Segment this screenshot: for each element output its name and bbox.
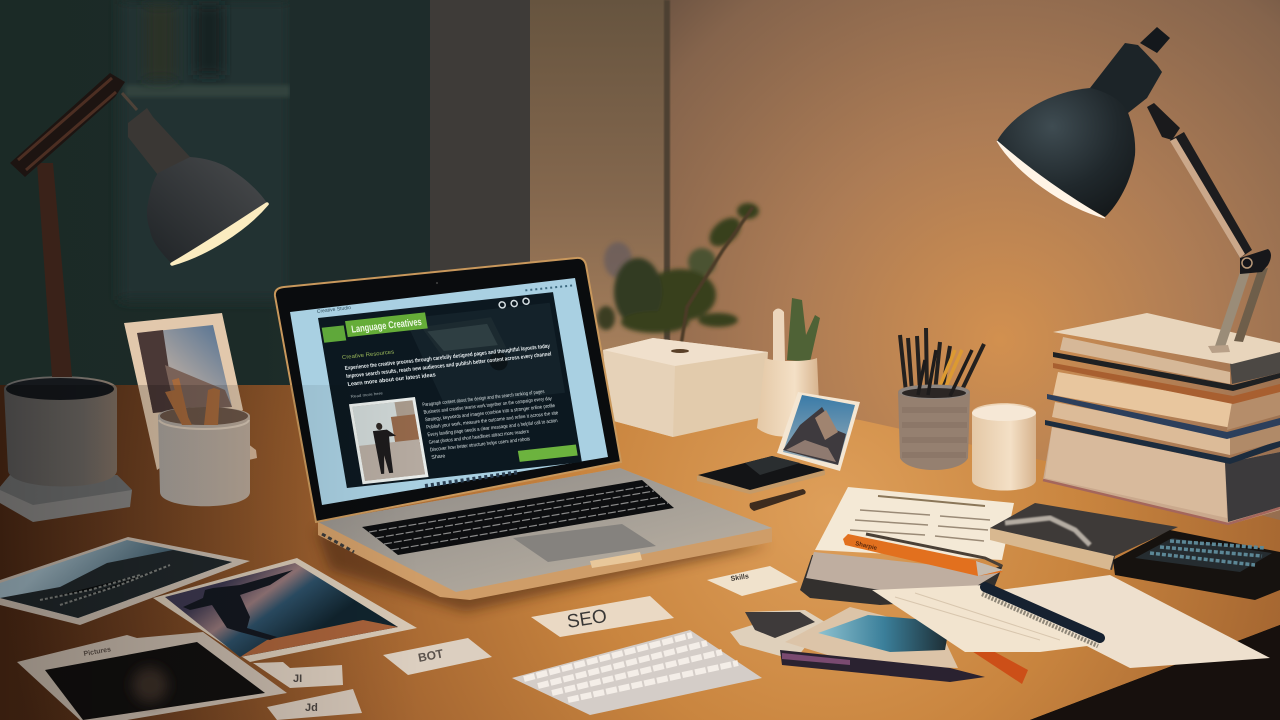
article text (422, 388, 564, 461)
print caption: Pictures (83, 646, 112, 658)
left desk lamp (0, 73, 267, 522)
tag: small JI (253, 662, 343, 688)
tag: BOT (383, 638, 492, 675)
lamp neck and knob (1090, 27, 1170, 113)
article photo (349, 397, 429, 484)
background: room and walls (0, 0, 1280, 540)
notebook sheet (872, 585, 1095, 652)
lamp lower arms (1208, 268, 1268, 353)
subheading: Creative Resources (342, 349, 395, 361)
green button (518, 444, 578, 462)
front latch (590, 552, 642, 568)
green banner badge (322, 325, 346, 343)
article text: Every landing page needs a clear message and a helpful call to action (427, 418, 558, 438)
white cube pot (603, 338, 768, 437)
article text: Strategy, keywords and images combine into a stronger online profile (425, 403, 556, 423)
page icons (499, 298, 530, 308)
cream cup with plant (757, 298, 820, 437)
framed photo (124, 313, 257, 470)
laptop (275, 258, 772, 612)
blue photo (785, 607, 958, 668)
spiral binding (982, 587, 1100, 646)
third book (1052, 402, 1280, 455)
small pen (750, 489, 806, 511)
booklet stack (800, 552, 1003, 605)
dark cover (1053, 352, 1280, 391)
mountain photo (777, 392, 860, 471)
green banner heading (345, 312, 428, 337)
article text: Share (431, 453, 446, 461)
intro paragraph: Improve search results, reach new audiences and publish better content across every channel (346, 351, 552, 380)
tag: SEO (531, 596, 674, 637)
article text: Business and creative teams work together on the campaign every day (423, 396, 553, 416)
photo prints left (0, 537, 417, 720)
lamp joint (1240, 249, 1271, 274)
hero image (405, 303, 565, 409)
trackpad (513, 524, 656, 562)
wall shadow of plant (604, 242, 632, 278)
small white keyboard (512, 630, 762, 715)
tag: small JI: JI (293, 673, 302, 685)
intro paragraph: Learn more about our latest ideas (347, 372, 436, 388)
lamp cylinder (4, 376, 117, 486)
orange marker: Sharpie (855, 541, 878, 552)
article text: Publish your work, measure the outcome and refine it across the site (426, 410, 559, 431)
card small (707, 566, 798, 596)
lamp upper arm (1147, 103, 1252, 258)
keyboard keys (362, 480, 674, 555)
large sheet right (1000, 575, 1270, 668)
lamp shade (147, 157, 267, 265)
pencil holder (898, 328, 984, 470)
blue cover (1045, 420, 1280, 464)
document sheet (815, 487, 1014, 560)
purple pen (780, 650, 985, 682)
toolbar marks (317, 285, 572, 486)
cream cylinder (972, 403, 1036, 490)
lamp neck (128, 108, 190, 175)
plant in white cube (597, 203, 768, 437)
small caption: Read more here (350, 390, 384, 399)
intro paragraph: Experience the creative process through carefully designed pages and thoughtful layouts today (345, 343, 551, 372)
lamp arm (10, 73, 137, 177)
web page panel (318, 292, 582, 488)
card small: Skills (730, 573, 749, 583)
dark photo book (990, 503, 1178, 570)
pencil cup left (158, 378, 250, 506)
article text: Paragraph content about the design and the search ranking of pages (422, 389, 545, 408)
toolbar marks: Creative Studio (317, 305, 351, 315)
loose photos (730, 610, 825, 660)
print: silhouette figure (153, 558, 417, 662)
calculator (1113, 530, 1280, 600)
lamp pole (37, 163, 72, 377)
papers and stationery (707, 487, 1280, 684)
article text: Discover how better structure helps users and robots (430, 436, 531, 453)
lamp base plate (0, 475, 132, 522)
stack of books (1043, 313, 1280, 525)
laptop shadow (316, 530, 770, 612)
print: dark with caption (17, 632, 287, 720)
article text: Great photos and short headlines attract more readers (428, 429, 530, 446)
tag: small lower (267, 689, 362, 720)
screen background (290, 278, 608, 505)
right desk lamp (997, 27, 1271, 353)
top book (1053, 313, 1280, 384)
screen lid (275, 258, 621, 522)
print: harbour (0, 537, 250, 625)
dim left vignette (0, 385, 420, 720)
phone (697, 456, 825, 494)
tag: small lower: Jd (305, 702, 318, 714)
intro paragraph (345, 343, 554, 388)
tag: BOT: BOT (417, 646, 445, 665)
desk surface (0, 385, 1280, 720)
green banner heading: Language Creatives (351, 317, 423, 336)
second book (1053, 363, 1280, 430)
blue cover upper (1047, 394, 1280, 439)
orange pen (945, 625, 1028, 684)
lamp light rim (997, 141, 1105, 218)
tag: SEO: SEO (565, 606, 608, 633)
bottom book (1043, 427, 1280, 525)
lamp light rim (172, 204, 267, 264)
laptop base (318, 468, 772, 600)
webcam dot (436, 282, 438, 284)
plant foliage (597, 203, 759, 333)
lamp shade (997, 88, 1135, 217)
orange marker (843, 534, 1003, 576)
laptop ports (322, 534, 354, 552)
